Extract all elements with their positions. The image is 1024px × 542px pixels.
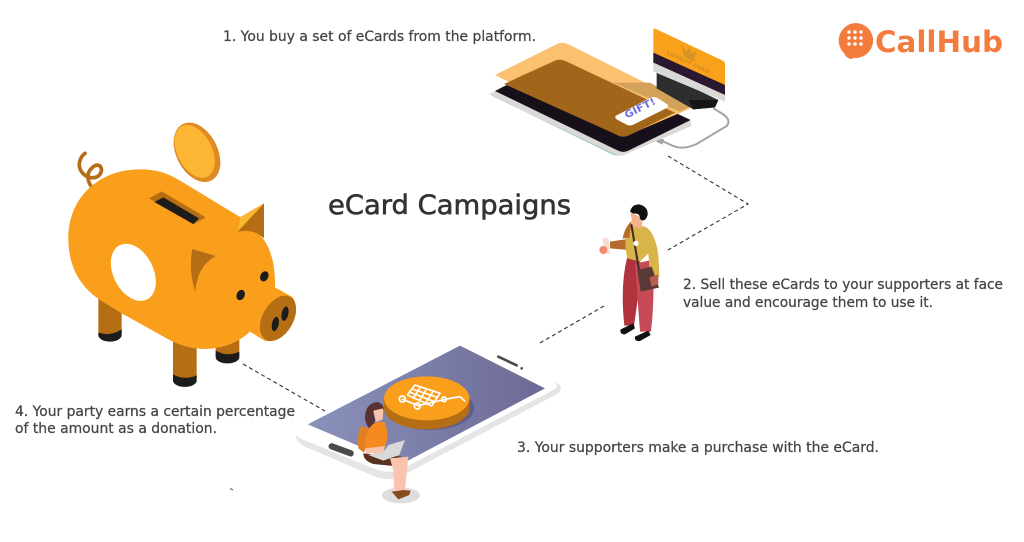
step 2 text: 2. Sell these eCards to your supporters at face (683, 277, 1003, 293)
card reader cable (658, 108, 728, 148)
gift tag (615, 97, 668, 125)
icon: shopping cart (399, 385, 465, 409)
skirt (363, 453, 402, 466)
arm and hand (610, 239, 628, 250)
shoes (620, 323, 635, 334)
speaker (498, 357, 517, 365)
tail (79, 153, 101, 191)
cart coin (384, 399, 469, 429)
overlay upper (495, 43, 692, 137)
left leg (623, 257, 640, 326)
back arm (358, 426, 372, 453)
coin (164, 115, 230, 190)
crown (682, 45, 697, 62)
hand on bag (649, 274, 658, 287)
illustration: standing person (599, 204, 659, 341)
phone body (296, 346, 557, 472)
tablet screen (495, 60, 691, 152)
strap (631, 224, 639, 270)
step 2 text: value and encourage them to use it. (683, 295, 933, 311)
illustration: tablet and card reader (489, 29, 728, 156)
step 4 text (15, 404, 295, 437)
bag (637, 267, 659, 292)
floor shadow (382, 487, 420, 503)
badge (633, 241, 639, 246)
ear (238, 203, 264, 238)
legs (390, 457, 408, 491)
overlay overlap (504, 60, 675, 137)
title: eCard Campaigns (328, 190, 571, 221)
reader (657, 70, 718, 109)
hole (102, 236, 165, 308)
step 2 text (683, 277, 1003, 311)
home button (332, 446, 351, 453)
illustration: tablet and card reader: GIFT! (623, 96, 658, 121)
arrow: dashed connector from person to phone (540, 306, 604, 343)
step 3 text: 3. Your supporters make a purchase with the eCard. (517, 440, 879, 456)
torso (365, 422, 387, 449)
cart coin shadow (386, 387, 474, 430)
arm (365, 446, 385, 453)
front leg (173, 337, 197, 384)
coin slot (149, 191, 206, 224)
laptop (368, 440, 405, 461)
arrow: dashed connector from phone to piggy bank (243, 364, 325, 411)
illustration: tablet and card reader: LOYALTY CARD (666, 50, 710, 75)
step 4 text: of the amount as a donation. (15, 421, 217, 437)
step 4 text: 4. Your party earns a certain percentage (15, 404, 295, 420)
step 1 text: 1. You buy a set of eCards from the platform. (223, 29, 536, 45)
hair (630, 204, 648, 220)
shoes (392, 490, 411, 499)
body (68, 169, 296, 349)
illustration: phone with shopping cart and seated woman (296, 346, 561, 503)
arrow: dashed connector from tablet to person (668, 156, 748, 250)
hair (365, 402, 384, 430)
right leg (635, 260, 654, 332)
logo: CallHub: CallHub (875, 25, 1003, 59)
illustration: piggy bank (68, 115, 304, 387)
tablet base (489, 57, 691, 156)
snout (252, 289, 304, 347)
eyes (258, 270, 270, 283)
neck and face (631, 212, 643, 228)
icon: speech bubble keypad (839, 23, 873, 59)
wing (191, 249, 216, 292)
torso (625, 223, 659, 277)
back legs (98, 297, 122, 339)
loyalty card (653, 29, 725, 102)
phone shadow (296, 347, 561, 479)
face (373, 408, 383, 422)
